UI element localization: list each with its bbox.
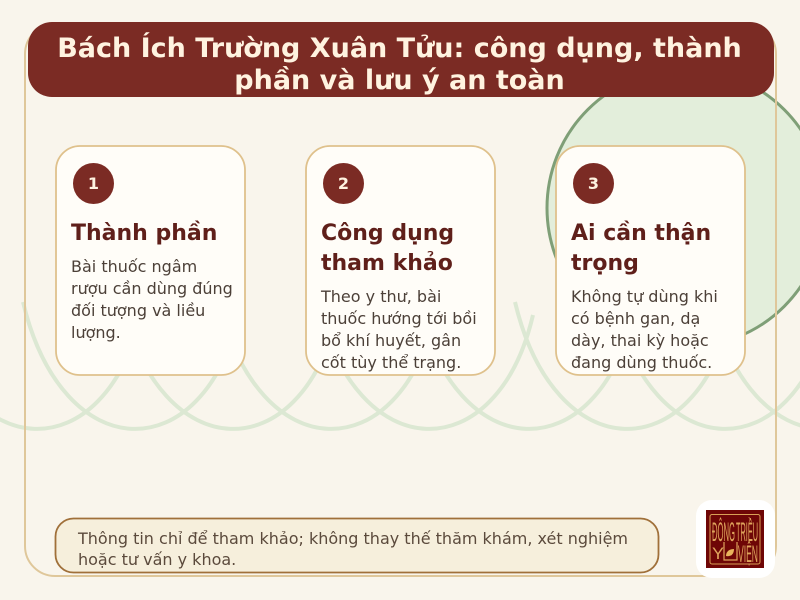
heading: tham khảo: [321, 251, 453, 276]
panel: thành phần: [55, 145, 246, 376]
heading: Ai cần thận: [571, 221, 711, 246]
heading: [571, 220, 711, 276]
heading: Thành phần: [71, 221, 217, 246]
disclaimer callout: Thông tin chỉ để tham khảo; không thay thế thăm khám, xét nghiệm: [78, 529, 628, 548]
green circle: [547, 69, 800, 347]
title: Bách Ích Trường Xuân Tửu: công dụng, thành: [57, 33, 742, 64]
text block: bổ khí huyết, gân: [321, 331, 461, 350]
text block: cốt tùy thể trạng.: [321, 353, 461, 372]
text block: đối tượng và liều: [71, 301, 205, 320]
badge 3: 3: [588, 174, 599, 193]
text block: rượu cần dùng đúng: [71, 279, 233, 298]
text block: lượng.: [71, 323, 121, 342]
logo: Y: [712, 544, 724, 563]
badge 2: [323, 163, 364, 204]
heading: trọng: [571, 251, 639, 276]
text block: có bệnh gan, dạ: [571, 309, 700, 328]
text block: Theo y thư, bài: [321, 287, 441, 306]
panel: ai cần thận trọng: [555, 145, 746, 376]
text block: Không tự dùng khi: [571, 287, 718, 306]
text block: Bài thuốc ngâm: [71, 257, 197, 276]
badge 1: 1: [88, 174, 99, 193]
disclaimer callout: [54, 518, 660, 574]
text block: thuốc hướng tới bồi: [321, 309, 477, 328]
badge 1: [73, 163, 114, 204]
disclaimer callout: hoặc tư vấn y khoa.: [78, 550, 236, 569]
badge 3: [573, 163, 614, 204]
text block: đang dùng thuốc.: [571, 353, 712, 372]
wave arcs: [0, 302, 800, 429]
title: phần và lưu ý an toàn: [234, 65, 565, 96]
text block: [320, 287, 477, 372]
panel: công dụng: [305, 145, 496, 376]
text block: dày, thai kỳ hoặc: [571, 331, 709, 350]
badge 2: 2: [338, 174, 349, 193]
heading: Công dụng: [321, 221, 454, 246]
text block: [571, 287, 718, 372]
logo: [696, 500, 775, 578]
heading: [321, 221, 454, 276]
text block: [71, 257, 233, 342]
title: [28, 22, 774, 97]
